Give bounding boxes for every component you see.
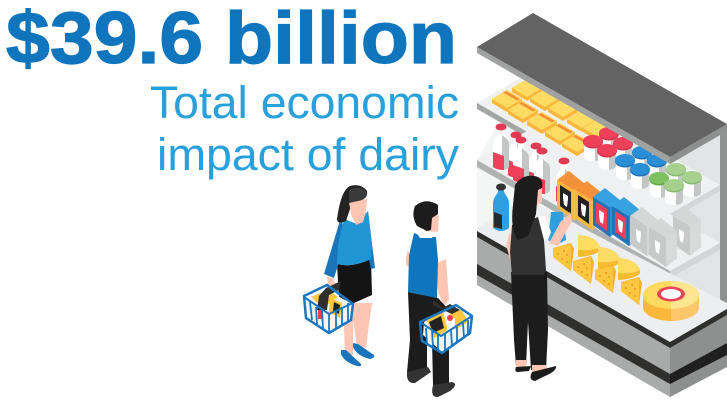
near arm xyxy=(433,259,449,306)
hair xyxy=(512,176,542,240)
trousers xyxy=(407,292,449,385)
blue top xyxy=(337,211,372,265)
milk bottles xyxy=(493,124,572,204)
hair xyxy=(413,201,438,231)
carton 5 xyxy=(673,207,701,256)
legs xyxy=(343,303,372,355)
sleeve xyxy=(533,216,551,241)
milk cartons: yellow, blue, grey xyxy=(557,171,701,267)
figure: woman with basket xyxy=(324,185,375,366)
shoes xyxy=(341,343,374,366)
shoes xyxy=(407,367,455,397)
cheese wheel xyxy=(643,281,699,321)
figure: man with basket xyxy=(406,201,455,397)
hand xyxy=(327,277,336,290)
white sleeve xyxy=(430,233,446,267)
shelf side panel xyxy=(670,127,727,340)
basket: man xyxy=(420,300,472,353)
basket: woman xyxy=(304,281,353,333)
butter blocks xyxy=(492,79,613,156)
subtitle: impact of dairy: impact of dairy xyxy=(157,129,460,180)
lower shelf xyxy=(477,131,720,278)
neck xyxy=(350,212,366,225)
collar xyxy=(416,232,434,238)
face xyxy=(535,186,542,206)
trousers xyxy=(511,272,548,370)
yogurt cups: red, blue, green xyxy=(583,127,702,205)
carton 4 xyxy=(612,197,640,246)
illustration: dairy shelf unit xyxy=(477,13,727,397)
cabinet base xyxy=(477,231,727,397)
carton 1 xyxy=(557,171,585,220)
carton 6 xyxy=(630,207,658,256)
title: $39.6 billion: $39.6 billion xyxy=(6,0,457,79)
far arm reaching shelf xyxy=(549,212,572,246)
shoes xyxy=(515,366,556,381)
subtitle: Total economic: Total economic xyxy=(150,77,459,128)
blue bottle xyxy=(493,184,509,231)
base deck with cheese xyxy=(477,199,727,342)
near arm xyxy=(506,232,517,266)
ankles xyxy=(516,360,546,373)
face xyxy=(424,212,439,232)
face xyxy=(349,199,367,214)
figure: woman at shelf xyxy=(506,176,572,381)
shelf back wall xyxy=(477,30,727,340)
blue bottle behind shopper xyxy=(548,212,566,245)
vest xyxy=(510,217,546,275)
carton 2 xyxy=(575,181,603,230)
upper shelf xyxy=(477,74,720,220)
blue vest xyxy=(408,233,438,298)
top canopy of shelf xyxy=(477,13,727,164)
hair xyxy=(337,185,367,223)
skirt xyxy=(337,259,372,303)
carton 3 xyxy=(593,188,621,237)
cheese wedges xyxy=(553,235,642,305)
carton 7 xyxy=(649,218,677,267)
arms xyxy=(324,211,375,278)
far arm xyxy=(406,250,412,268)
